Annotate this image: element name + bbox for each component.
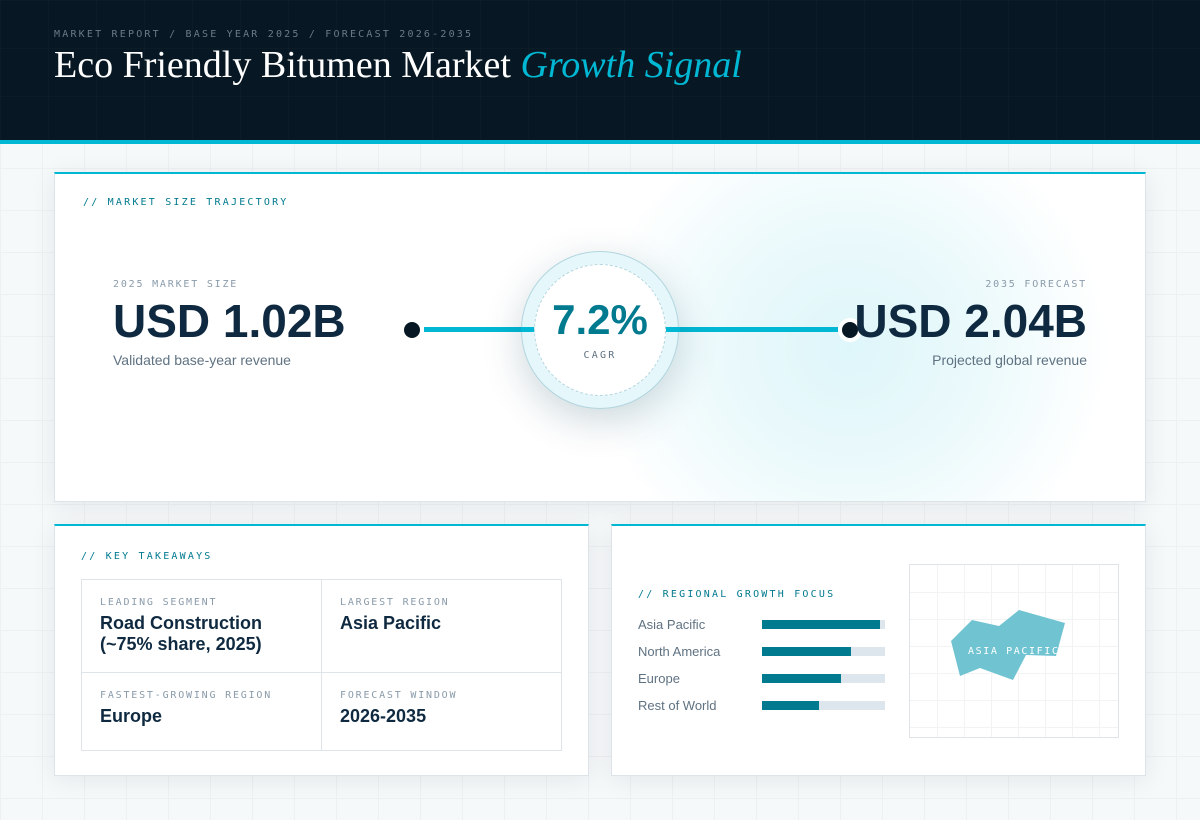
panel: market size trajectory bbox=[54, 172, 1146, 502]
inner dashed circle bbox=[534, 264, 666, 396]
region bar chart bbox=[638, 617, 885, 713]
2035 value: USD 2.04B bbox=[854, 295, 1087, 347]
bar: North America bbox=[762, 647, 885, 656]
region name: North America: North America bbox=[638, 644, 720, 659]
end dot bbox=[838, 318, 862, 342]
cell: largest region bbox=[322, 580, 561, 673]
report eyebrow: MARKET REPORT / BASE YEAR 2025 / FORECAST 2026-2035 bbox=[54, 29, 473, 40]
label: LEADING SEGMENT bbox=[100, 597, 217, 608]
trajectory connector line bbox=[424, 327, 838, 332]
value: Europe bbox=[100, 706, 162, 726]
value: 2026-2035 bbox=[340, 706, 426, 726]
2035 label: 2035 FORECAST bbox=[985, 279, 1087, 290]
region name: Europe: Europe bbox=[638, 671, 680, 686]
map panel bbox=[909, 564, 1119, 738]
bar: Rest of World bbox=[762, 701, 885, 710]
value: Road Construction bbox=[100, 613, 262, 633]
section heading: // KEY TAKEAWAYS bbox=[81, 551, 213, 562]
background glow bbox=[590, 104, 1110, 594]
start dot bbox=[404, 322, 420, 338]
CAGR label: CAGR bbox=[584, 350, 616, 361]
bar: Asia Pacific bbox=[762, 620, 885, 629]
value: (~75% share, 2025) bbox=[100, 634, 262, 654]
2035 caption: Projected global revenue bbox=[932, 352, 1087, 368]
bar: Europe bbox=[762, 674, 885, 683]
takeaways table bbox=[81, 579, 562, 751]
region name: Asia Pacific: Asia Pacific bbox=[638, 617, 705, 632]
2025 caption: Validated base-year revenue bbox=[113, 352, 291, 368]
map label: ASIA PACIFIC bbox=[968, 646, 1059, 657]
section heading: // MARKET SIZE TRAJECTORY bbox=[83, 197, 289, 208]
label: FORECAST WINDOW bbox=[340, 690, 457, 701]
CAGR badge bbox=[521, 251, 679, 409]
CAGR value: 7.2% bbox=[552, 296, 648, 343]
cell: leading segment bbox=[82, 580, 322, 673]
2025 market size block bbox=[113, 279, 346, 368]
connector through ring, left bbox=[521, 327, 536, 332]
label: FASTEST-GROWING REGION bbox=[100, 690, 272, 701]
cell: fastest-growing region bbox=[82, 673, 322, 750]
title: Eco Friendly Bitumen Market Growth Signal bbox=[54, 44, 742, 86]
panel: regional growth focus background bbox=[611, 524, 1146, 776]
map shape: Asia Pacific bbox=[951, 610, 1065, 680]
header banner bbox=[0, 0, 1200, 144]
2025 value: USD 1.02B bbox=[113, 295, 346, 347]
value bbox=[100, 613, 262, 654]
label: LARGEST REGION bbox=[340, 597, 450, 608]
panel: key takeaways bbox=[54, 524, 589, 776]
cell: forecast window bbox=[340, 690, 457, 726]
section heading: regional growth focus: // REGIONAL GROWTH FOCUS bbox=[638, 589, 835, 600]
value: Asia Pacific bbox=[340, 613, 441, 633]
region name: Rest of World: Rest of World bbox=[638, 698, 717, 713]
2035 forecast block bbox=[854, 279, 1087, 368]
2025 label: 2025 MARKET SIZE bbox=[113, 279, 238, 290]
connector through ring, right bbox=[665, 327, 680, 332]
